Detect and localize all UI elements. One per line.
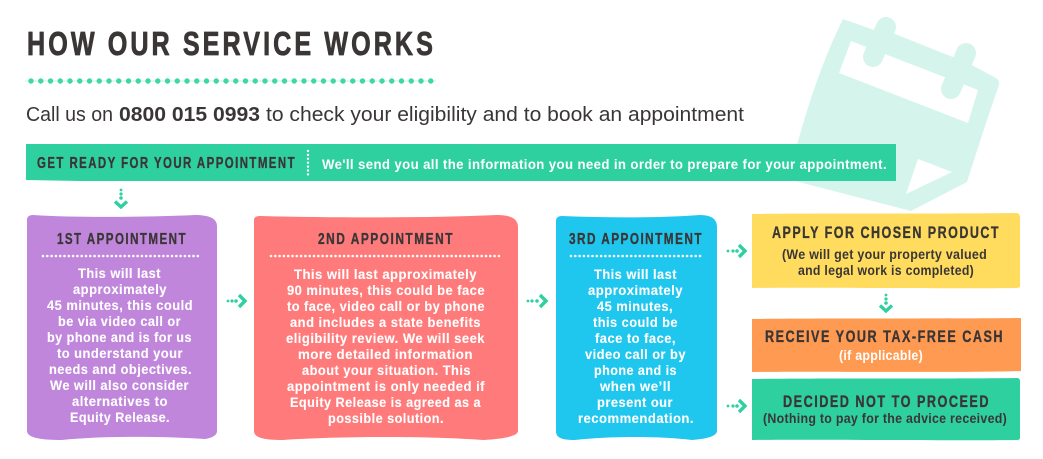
banner text: We'll send you all the information you need in order to prepare for your appointment. (322, 156, 887, 172)
body text: about your situation. This (302, 362, 471, 378)
heading: 3rd appointment: 3RD APPOINTMENT (569, 231, 703, 248)
body text (578, 266, 694, 426)
subtext (782, 247, 987, 278)
arrow: third to decided not to proceed (727, 400, 745, 412)
phone call to action (26, 104, 744, 126)
title: HOW OUR SERVICE WORKS (27, 25, 436, 62)
dotted rule (43, 255, 202, 257)
body text: This will last (78, 265, 161, 281)
body text (286, 266, 485, 426)
subtext: and legal work is completed) (798, 263, 974, 278)
body text: approximately (588, 282, 683, 298)
panel: receive your tax-free cash (752, 318, 1021, 372)
panel: apply for chosen product (752, 213, 1020, 288)
subtext: (if applicable) (839, 348, 923, 363)
body text: This will last approximately (294, 266, 477, 282)
dotted rule (271, 255, 502, 257)
dotted rule (571, 255, 702, 257)
body text: more detailed information (298, 346, 473, 362)
body text: 90 minutes, this could be face (287, 282, 485, 298)
panel: 1st appointment (27, 215, 217, 440)
heading: 1st appointment: 1ST APPOINTMENT (57, 231, 187, 248)
body text: We will also consider (50, 377, 189, 393)
subtext: (We will get your property valued (782, 247, 987, 262)
panel: 2nd appointment (254, 215, 518, 440)
body text: this could be (593, 314, 678, 330)
body text: to face, video call or by phone (287, 298, 485, 314)
body text: alternatives to (72, 393, 168, 409)
body text: when we’ll (599, 378, 671, 394)
heading: 2nd appointment: 2ND APPOINTMENT (318, 231, 454, 248)
phone call to action: 0800 015 0993 (119, 104, 260, 126)
body text: possible solution. (328, 410, 444, 426)
panel: 3rd appointment (556, 215, 717, 440)
arrow: down to first appointment (115, 189, 127, 207)
body text: This will last (594, 266, 677, 282)
arrow: apply to receive (880, 294, 892, 311)
body text: be via video call or (58, 313, 181, 329)
body text: by phone and is for us (47, 329, 192, 345)
subtext: (Nothing to pay for the advice received) (763, 411, 1007, 426)
body text: video call or by (585, 346, 686, 362)
phone call to action: to check your eligibility and to book an appointment (266, 104, 744, 126)
body text: 45 minutes, this could (47, 297, 193, 313)
body text (47, 265, 193, 425)
phone call to action: Call us on (26, 104, 113, 126)
body text: needs and objectives. (49, 361, 192, 377)
body text: Equity Release. (70, 409, 170, 425)
body text: and includes a state benefits (290, 314, 481, 330)
banner dotted separator (307, 151, 309, 175)
arrow: second to third (527, 295, 546, 307)
panel: decided not to proceed (752, 378, 1020, 440)
arrow: third to apply (727, 245, 745, 257)
body text: 45 minutes, (597, 298, 673, 314)
icon: calendar watermark (793, 19, 999, 211)
body text: face to face, (595, 330, 676, 346)
banner heading: GET READY FOR YOUR APPOINTMENT (37, 155, 296, 172)
body text: appointment is only needed if (287, 378, 485, 394)
body text: to understand your (57, 345, 183, 361)
panel: get ready banner (26, 144, 896, 181)
body text: phone and is (594, 362, 677, 378)
arrow: first to second (227, 295, 245, 307)
body text: approximately (73, 281, 167, 297)
body text: eligibility review. We will seek (286, 330, 485, 346)
body text: Equity Release is agreed as a (290, 394, 481, 410)
body text: present our (597, 394, 673, 410)
body text: recommendation. (578, 410, 694, 426)
dotted divider (25, 80, 436, 82)
